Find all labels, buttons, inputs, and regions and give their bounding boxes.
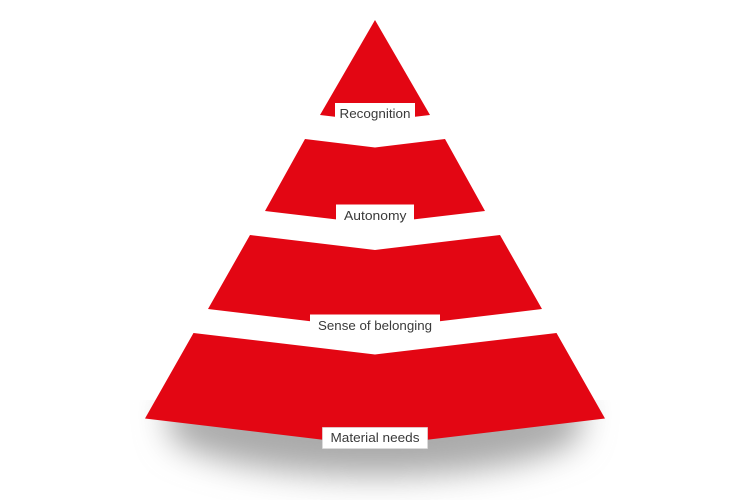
label: Material needs: Material needs bbox=[330, 430, 420, 445]
label: Sense of belonging: Sense of belonging bbox=[318, 318, 432, 333]
tier: sense of belonging bbox=[208, 235, 542, 336]
label: Material needs bbox=[322, 428, 428, 448]
label: Autonomy bbox=[336, 204, 414, 226]
tier: recognition bbox=[320, 20, 430, 125]
label: Autonomy: Autonomy bbox=[344, 208, 407, 223]
tier: material needs bbox=[145, 333, 605, 448]
label: Recognition: Recognition bbox=[340, 106, 410, 121]
pyramid infographic bbox=[145, 20, 605, 496]
label: Sense of belonging bbox=[310, 314, 440, 336]
drop shadow under the pyramid bbox=[165, 400, 585, 476]
tier: autonomy bbox=[265, 139, 485, 226]
